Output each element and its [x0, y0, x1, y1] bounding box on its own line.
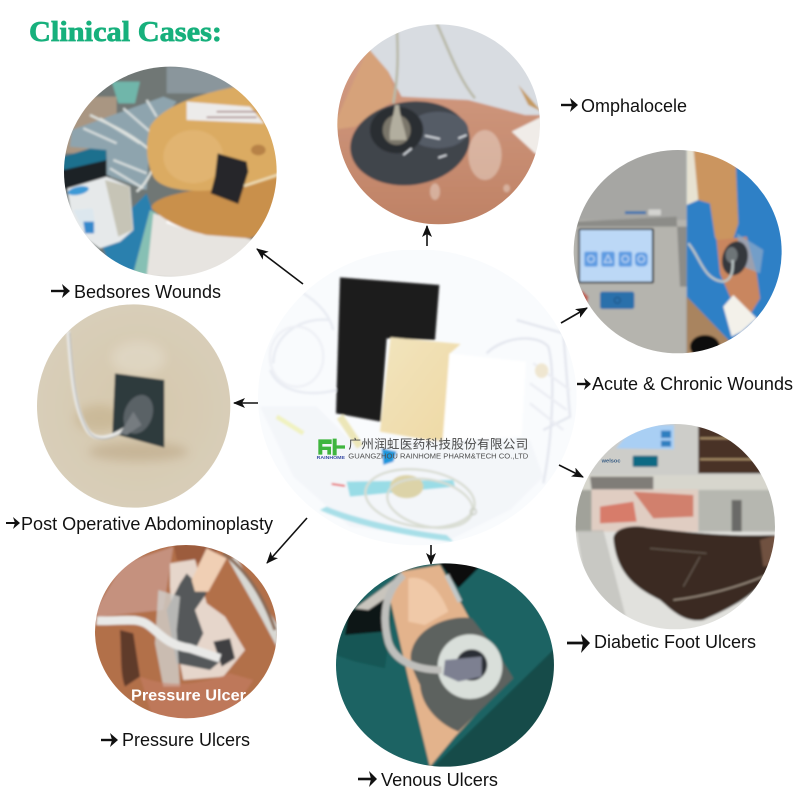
- company name Chinese: 广州润虹医药科技股份有限公司: [348, 438, 528, 452]
- logo wordmark: RAINHOME: [317, 455, 345, 460]
- photo: venous ulcer: [336, 563, 554, 767]
- photo: post operative abdominoplasty: [37, 304, 230, 508]
- coiled tubing right: [487, 320, 570, 483]
- label: diabetic foot ulcers: Diabetic Foot Ulcers: [594, 632, 756, 652]
- coiled tubing left: [270, 293, 337, 393]
- photo: omphalocele: [337, 24, 540, 224]
- arrow: centre to diabetic foot: [559, 465, 583, 477]
- label: acute and chronic wounds: Acute & Chronic Wounds: [592, 374, 793, 394]
- lower packaging: [331, 438, 444, 488]
- label: bedsores wounds: Bedsores Wounds: [74, 282, 221, 302]
- arrow: centre to bedsores: [257, 249, 303, 284]
- company logo: [317, 438, 528, 461]
- white foam: [442, 353, 452, 439]
- black foam: [336, 277, 439, 422]
- label: pressure ulcers: Pressure Ulcers: [122, 730, 250, 750]
- arrow: centre to abdominoplasty: [234, 402, 258, 404]
- central product photo: [261, 275, 572, 542]
- photo caption: Pressure Ulcer: [131, 688, 246, 705]
- label: post operative abdominoplasty: Post Operative Abdominoplasty: [21, 514, 273, 534]
- cream foam: [380, 337, 461, 443]
- arrow: centre to venous ulcer: [430, 545, 432, 564]
- arrow: centre to omphalocele: [426, 226, 428, 246]
- logo mark: [318, 439, 345, 455]
- photo: bedsores wound: [64, 66, 277, 277]
- device brand text: welsoc: [601, 459, 621, 465]
- label: venous ulcers: Venous Ulcers: [381, 770, 498, 790]
- photo: diabetic foot ulcer: [576, 424, 775, 630]
- arrow: centre to acute wounds: [561, 308, 587, 323]
- title: Clinical Cases:: [29, 16, 222, 48]
- arrow: centre to pressure ulcer: [267, 518, 307, 563]
- company name English: GUANGZHOU RAINHOME PHARM&TECH CO.,LTD: [348, 454, 528, 461]
- label: omphalocele: Omphalocele: [581, 96, 687, 116]
- photo: acute and chronic wounds: [574, 150, 782, 354]
- photo: pressure ulcer: [95, 545, 277, 718]
